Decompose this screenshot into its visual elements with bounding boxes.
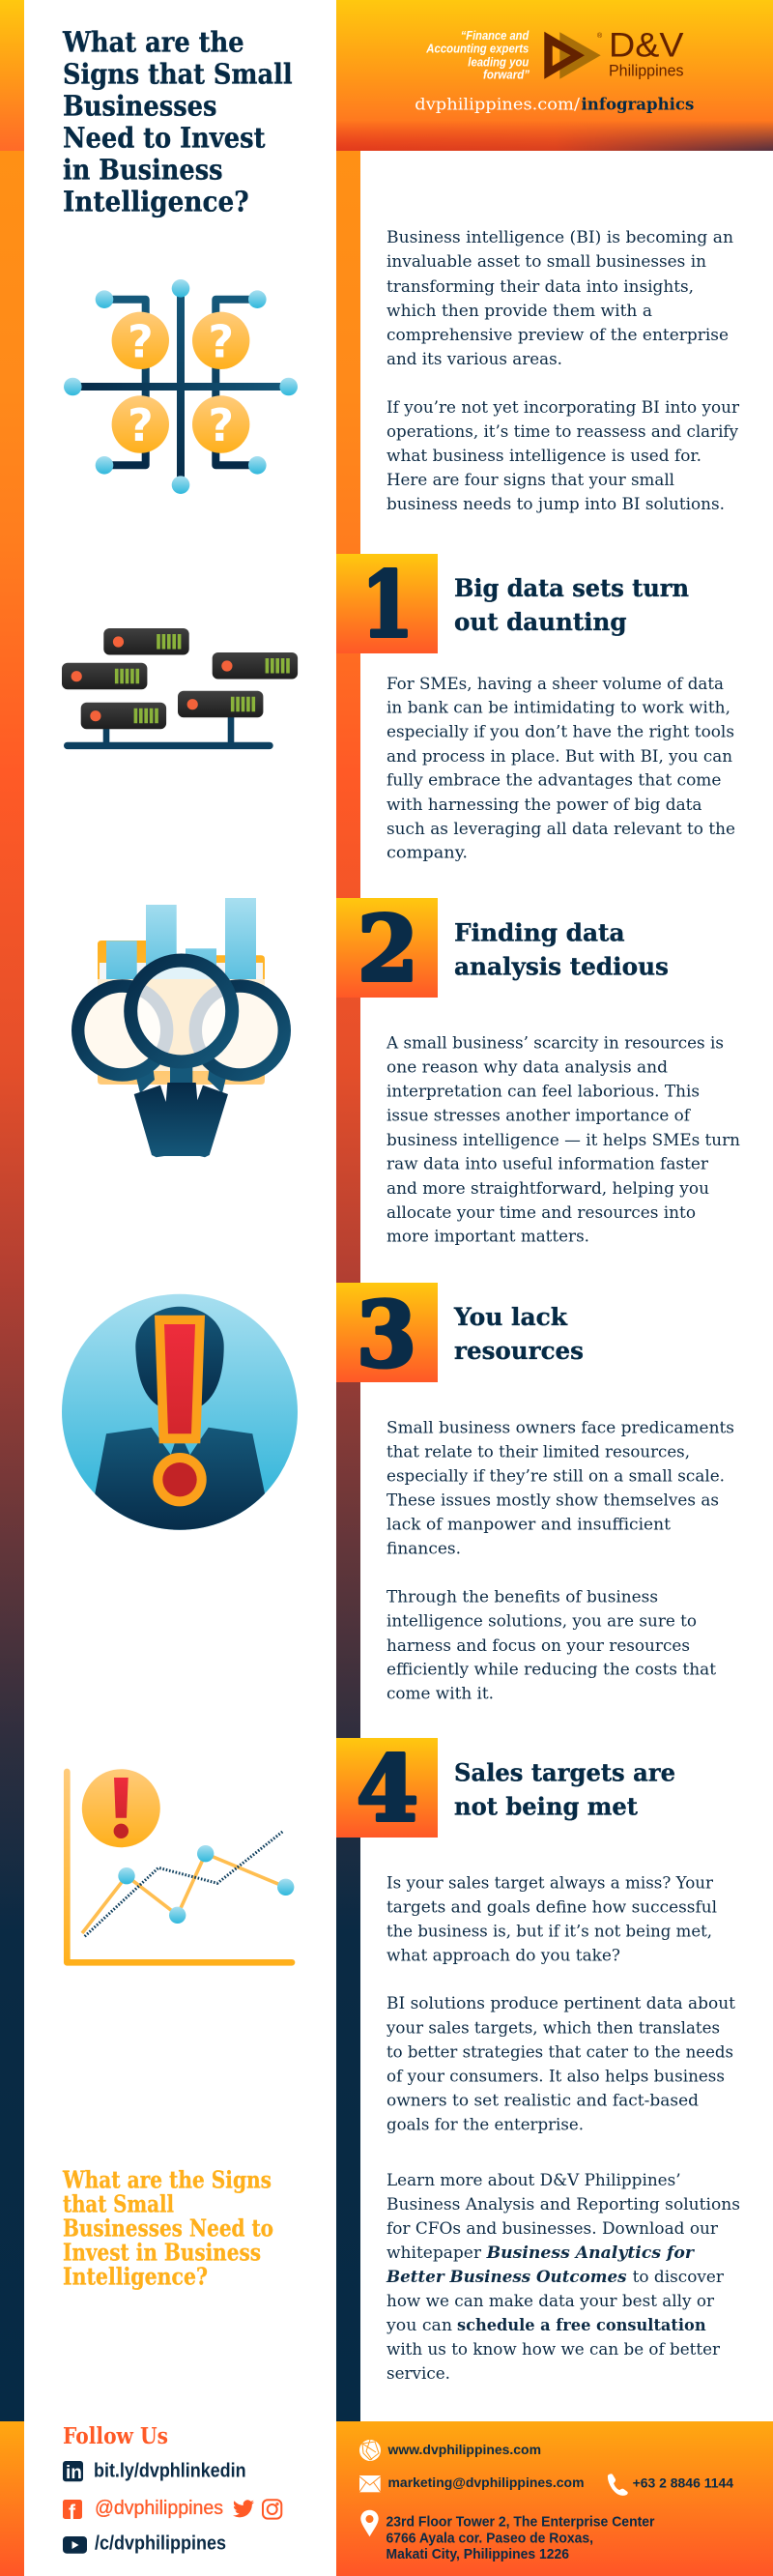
tagline: leading you — [468, 55, 530, 69]
icon: circuit with question marks: ? — [208, 399, 234, 451]
intro text: Here are four signs that your small — [386, 471, 674, 489]
section 4 text: the business is, but if it’s not being met, — [386, 1922, 712, 1941]
icon: facebook — [63, 2500, 82, 2524]
icon: youtube — [63, 2536, 87, 2554]
tagline: Accounting experts — [425, 43, 529, 56]
follow us block — [63, 2423, 281, 2554]
section 1 heading: Big data sets turn — [454, 574, 689, 602]
section 2 heading: analysis tedious — [454, 953, 669, 980]
section 1 heading: out daunting — [454, 608, 626, 636]
youtube handle: /c/dvphilippines — [95, 2533, 226, 2554]
section 4 text: of your consumers. It also helps business — [386, 2067, 725, 2086]
section 3 text: Small business owners face predicaments — [386, 1418, 734, 1436]
section 2 number badge — [336, 896, 438, 1001]
logo: D&V — [609, 26, 684, 64]
closing call to action text: service. — [386, 2364, 450, 2383]
section 4 text: targets and goals define how successful — [386, 1898, 717, 1916]
section 2 text: A small business’ scarcity in resources is — [386, 1034, 724, 1052]
header banner — [336, 0, 773, 151]
section 4 heading: Sales targets are — [454, 1759, 675, 1786]
section 1 text: especially if you don’t have the right tools — [386, 723, 734, 741]
title: Need to Invest — [63, 122, 266, 155]
section 3 text: come with it. — [386, 1685, 494, 1703]
intro text: what business intelligence is used for. — [386, 447, 701, 465]
icon: circuit with question marks: ? — [208, 315, 234, 367]
icon: circuit with question marks — [64, 279, 298, 494]
closing call to action text: schedule a free consultation — [457, 2316, 706, 2334]
icon: phone — [608, 2474, 628, 2496]
section 2 number badge: 2 — [358, 896, 418, 1001]
section 4 text: owners to set realistic and fact-based — [386, 2092, 699, 2109]
website link: infographics — [582, 95, 694, 114]
left gradient stripe — [0, 0, 24, 2576]
address — [386, 2514, 655, 2562]
section 1 text: such as leveraging all data relevant to the — [386, 820, 735, 838]
icon: facebook: f — [69, 2502, 76, 2524]
closing call to action text: you can — [386, 2316, 452, 2334]
section 4 text: what approach do you take? — [386, 1947, 620, 1965]
section 4 heading: not being met — [454, 1792, 638, 1821]
section 4 number badge — [336, 1736, 438, 1841]
closing call to action text — [386, 2171, 740, 2383]
closing title repeat — [62, 2166, 273, 2291]
icon: linkedin: in — [66, 2463, 82, 2483]
linkedin handle: bit.ly/dvphlinkedin — [94, 2461, 246, 2482]
closing call to action text: to discover — [633, 2268, 724, 2286]
icon: envelope — [359, 2475, 381, 2492]
section 2 text: more important matters. — [386, 1228, 589, 1246]
closing call to action text: whitepaper — [386, 2243, 481, 2262]
intro text: business needs to jump into BI solutions. — [386, 495, 725, 513]
section 4 text: goals for the enterprise. — [386, 2115, 584, 2134]
intro text: Business intelligence (BI) is becoming an — [386, 228, 733, 246]
section 3 text: lack of manpower and insufficient — [386, 1516, 671, 1534]
title: in Business — [63, 153, 223, 186]
logo: ® — [597, 32, 603, 40]
section 3 heading: You lack — [453, 1303, 568, 1331]
closing call to action text: Better Business Outcomes — [386, 2268, 626, 2286]
section 3 text: that relate to their limited resources, — [386, 1443, 690, 1462]
intro text: which then provide them with a — [386, 302, 652, 320]
section 2 text: issue stresses another importance of — [386, 1107, 692, 1125]
handles — [134, 1083, 228, 1157]
section 3 text: harness and focus on your resources — [386, 1636, 690, 1655]
icon: circuit with question marks: ? — [128, 399, 154, 451]
closing call to action text: how we can make data your best ally or — [386, 2292, 714, 2310]
section 3 text: intelligence solutions, you are sure to — [386, 1612, 697, 1631]
section 1 text: For SMEs, having a sheer volume of data — [386, 675, 724, 693]
centre gradient stripe — [336, 151, 360, 2421]
address: Makati City, Philippines 1226 — [386, 2546, 569, 2562]
intro text: invaluable asset to small businesses in — [386, 252, 706, 271]
icon: twitter — [233, 2500, 254, 2517]
section 2 heading — [454, 918, 669, 980]
icon: globe — [359, 2440, 381, 2461]
section 1 number badge: 1 — [361, 552, 414, 657]
section 1 text — [386, 675, 735, 862]
section 4 number badge: 4 — [357, 1736, 418, 1841]
website: www.dvphilippines.com — [387, 2442, 541, 2457]
section 4 heading — [454, 1759, 675, 1821]
intro text — [386, 228, 739, 513]
section 3 number badge — [336, 1282, 438, 1387]
closing title repeat: Intelligence? — [63, 2263, 208, 2291]
logo: Philippines — [609, 61, 684, 79]
tagline: forward” — [483, 69, 530, 82]
section 1 text: and process in place. But with BI, you can — [386, 747, 732, 766]
section 4 text: to better strategies that cater to the needs — [386, 2043, 733, 2061]
phone number: +63 2 8846 1144 — [633, 2475, 733, 2491]
closing call to action text: with us to know how we can be of better — [386, 2340, 720, 2359]
closing title repeat: that Small — [63, 2190, 174, 2218]
section 3 number badge: 3 — [357, 1282, 416, 1387]
follow us heading: Follow Us — [63, 2423, 168, 2449]
intro text: transforming their data into insights, — [386, 277, 694, 296]
section 2 text: raw data into useful information faster — [386, 1154, 708, 1173]
section 2 text: business intelligence — it helps SMEs turn — [386, 1131, 740, 1149]
address: 6766 Ayala cor. Paseo de Roxas, — [386, 2530, 593, 2546]
section 2 text: and more straightforward, helping you — [386, 1179, 709, 1198]
intro text: operations, it’s time to reassess and clarify — [386, 422, 739, 441]
icon: circuit with question marks: ? — [128, 315, 154, 367]
section 2 text: one reason why data analysis and — [386, 1058, 668, 1077]
title — [62, 26, 293, 217]
tagline — [425, 29, 530, 82]
icon: magnifying glasses over chart — [78, 898, 284, 1157]
closing call to action text: for CFOs and businesses. Download our — [386, 2219, 718, 2238]
website link — [415, 95, 694, 114]
section 1 number badge — [336, 552, 438, 657]
intro text: If you’re not yet incorporating BI into your — [386, 398, 739, 417]
section 2 text: allocate your time and resources into — [386, 1203, 696, 1222]
section 1 heading — [454, 574, 689, 636]
closing call to action text: Business Analysis and Reporting solutions — [386, 2195, 740, 2214]
section 4 text: Is your sales target always a miss? Your — [386, 1873, 713, 1893]
website link: dvphilippines.com/ — [415, 95, 580, 114]
icon: servers — [62, 628, 298, 749]
icon: location pin — [360, 2510, 379, 2536]
title: Intelligence? — [63, 185, 249, 217]
section 4 text: your sales targets, which then translates — [386, 2018, 720, 2038]
logo — [544, 26, 684, 79]
section 3 heading — [453, 1303, 584, 1365]
section 3 text: especially if they’re still on a small scale. — [386, 1466, 725, 1485]
icon: person with exclamation mark — [62, 1294, 298, 1537]
section 1 text: fully embrace the advantages that come — [386, 771, 721, 790]
title: What are the — [62, 26, 244, 59]
twitter and facebook handle: @dvphilippines — [95, 2498, 223, 2519]
section 2 text: interpretation can feel laborious. This — [386, 1082, 700, 1100]
closing title repeat: Businesses Need to — [63, 2214, 273, 2243]
section 3 text: efficiently while reducing the costs that — [386, 1661, 716, 1678]
contact footer — [336, 2421, 773, 2576]
closing call to action text: Business Analytics for — [486, 2243, 695, 2262]
section 3 text: These issues mostly show themselves as — [386, 1491, 719, 1510]
section 3 text: Through the benefits of business — [386, 1587, 658, 1606]
icon: instagram — [263, 2500, 281, 2519]
section 1 text: in bank can be intimidating to work with, — [386, 698, 730, 717]
section 4 text: BI solutions produce pertinent data about — [386, 1994, 735, 2012]
address: 23rd Floor Tower 2, The Enterprise Center — [386, 2514, 655, 2531]
section 3 heading: resources — [454, 1337, 584, 1365]
section 1 text: with harnessing the power of big data — [386, 796, 702, 814]
intro text: comprehensive preview of the enterprise — [386, 326, 729, 344]
closing call to action text: Learn more about D&V Philippines’ — [386, 2171, 681, 2189]
section 3 text: finances. — [386, 1539, 461, 1557]
title: Signs that Small — [63, 58, 293, 91]
intro text: and its various areas. — [386, 350, 562, 368]
closing title repeat: Invest in Business — [63, 2239, 261, 2267]
section 2 heading: Finding data — [454, 918, 624, 947]
icon: line chart with alert — [67, 1769, 294, 1962]
section 1 text: company. — [386, 844, 468, 862]
section 4 text — [386, 1873, 735, 2134]
closing title repeat: What are the Signs — [62, 2166, 272, 2194]
section 3 text — [386, 1418, 734, 1703]
title: Businesses — [63, 90, 216, 123]
email: marketing@dvphilippines.com — [388, 2475, 584, 2490]
tagline: “Finance and — [461, 29, 530, 43]
section 2 text — [386, 1034, 740, 1246]
